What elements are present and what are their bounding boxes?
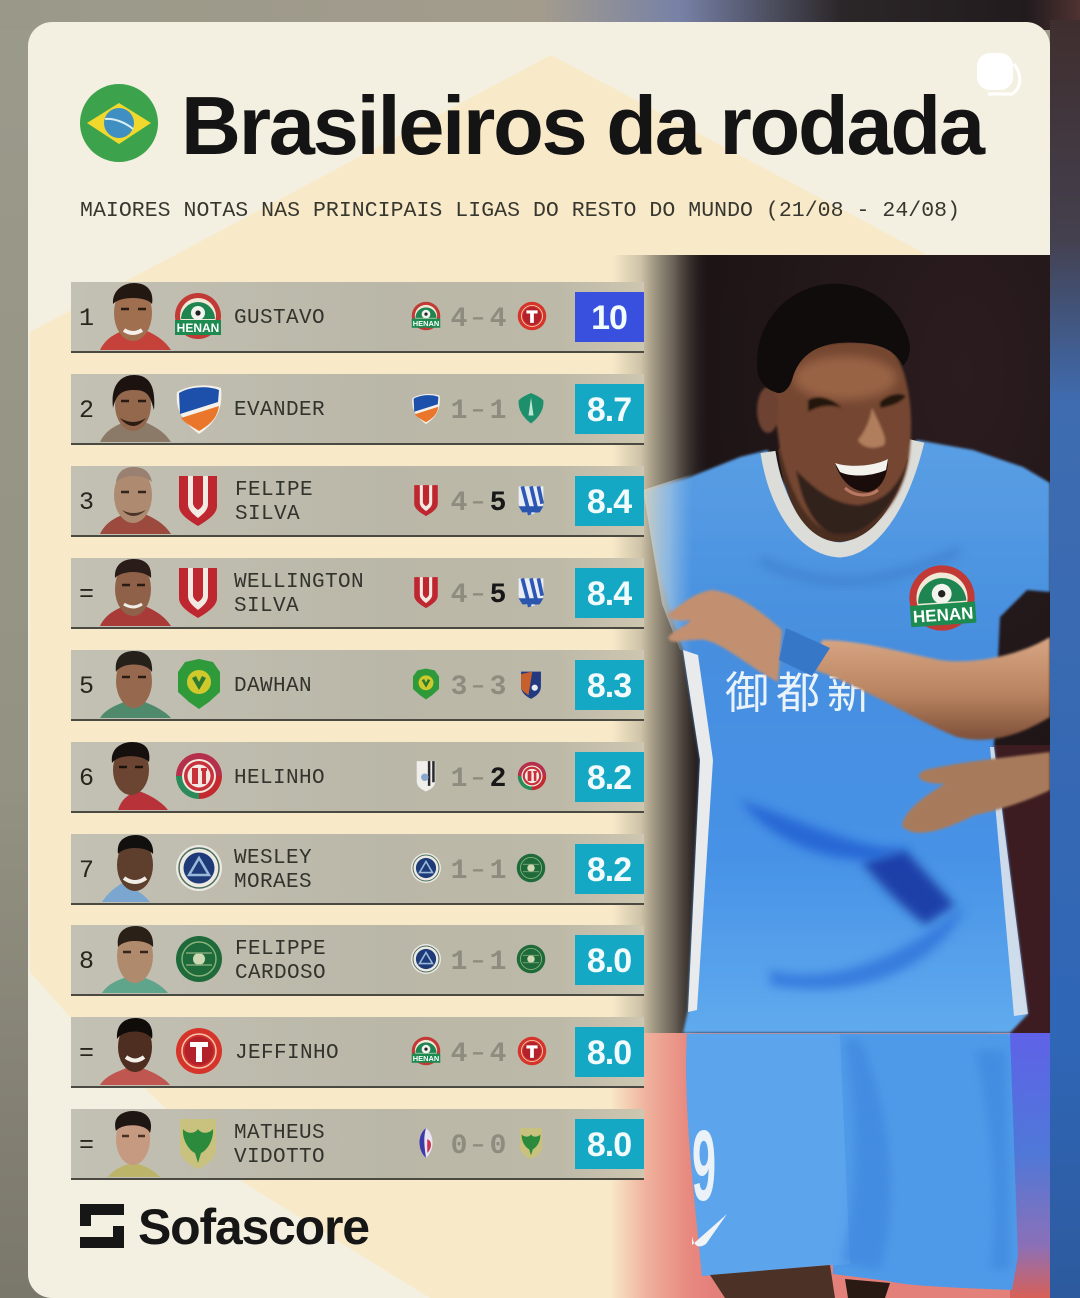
portrait bbox=[112, 742, 168, 810]
name: EVANDER bbox=[234, 399, 325, 422]
score: 4 bbox=[451, 580, 467, 611]
row 2: Evander bbox=[71, 374, 644, 445]
neck bbox=[778, 448, 908, 542]
rank: 8 bbox=[79, 947, 94, 976]
score: 1 bbox=[490, 396, 506, 427]
rating bbox=[575, 568, 644, 618]
logo mark bbox=[80, 1204, 124, 1248]
score bbox=[451, 672, 506, 703]
score bbox=[451, 947, 506, 978]
left fade bbox=[612, 255, 708, 1033]
rank: = bbox=[79, 1039, 94, 1068]
club badge: HENAN bbox=[177, 321, 219, 335]
score: – bbox=[471, 1040, 485, 1066]
score: – bbox=[471, 397, 485, 423]
subtitle: MAIORES NOTAS NAS PRINCIPAIS LIGAS DO RESTO DO MUNDO (21/08 - 24/08) bbox=[80, 199, 960, 223]
rank: = bbox=[79, 580, 94, 609]
jersey sponsor: 御都新 bbox=[725, 669, 871, 718]
rating bbox=[575, 476, 644, 526]
shorts: 9 bbox=[692, 1110, 716, 1222]
name: GUSTAVO bbox=[234, 307, 325, 330]
club badge bbox=[180, 1119, 216, 1169]
rank: 1 bbox=[79, 304, 94, 333]
club badge bbox=[176, 1028, 222, 1074]
forearm bbox=[815, 637, 1050, 740]
away badge bbox=[518, 762, 546, 790]
rating bbox=[575, 752, 644, 802]
portrait bbox=[100, 375, 171, 442]
row 1: Gustavo bbox=[71, 282, 644, 353]
score: 0 bbox=[490, 1131, 506, 1162]
score: 1 bbox=[451, 947, 467, 978]
henan crest on jersey bbox=[907, 563, 977, 633]
club badge bbox=[178, 659, 220, 709]
score: 3 bbox=[451, 672, 467, 703]
rating bbox=[575, 1119, 644, 1169]
rank: 7 bbox=[79, 856, 94, 885]
jersey creases bbox=[740, 550, 965, 989]
score: – bbox=[471, 673, 485, 699]
row 4: Wellington Silva bbox=[71, 558, 644, 629]
rank: 3 bbox=[79, 488, 94, 517]
portrait bbox=[102, 835, 153, 902]
name: FELIPPE bbox=[235, 938, 326, 961]
mouth bbox=[835, 459, 888, 492]
Sofascore logo bbox=[80, 1199, 370, 1255]
score: 3 bbox=[490, 672, 506, 703]
away badge bbox=[517, 945, 545, 973]
row 3: Felipe Silva bbox=[71, 466, 644, 537]
hand bbox=[667, 590, 782, 682]
rating: 8.2 bbox=[587, 759, 631, 797]
away badge bbox=[521, 672, 541, 699]
club badge bbox=[179, 476, 217, 526]
club badge bbox=[176, 936, 222, 982]
name: VIDOTTO bbox=[234, 1146, 325, 1169]
score: 4 bbox=[490, 304, 506, 335]
home badge bbox=[412, 1037, 440, 1065]
score bbox=[451, 764, 506, 795]
score: – bbox=[471, 489, 485, 515]
home badge bbox=[414, 485, 438, 516]
away badge bbox=[518, 1037, 546, 1065]
score bbox=[451, 1039, 506, 1070]
portrait bbox=[100, 467, 171, 534]
rating bbox=[575, 292, 644, 342]
portrait bbox=[100, 1018, 170, 1085]
rating: 8.7 bbox=[587, 391, 631, 429]
home badge bbox=[414, 577, 438, 608]
wristband bbox=[779, 628, 830, 676]
wordmark: Sofascore bbox=[138, 1199, 370, 1255]
name: SILVA bbox=[234, 595, 299, 618]
score: 2 bbox=[490, 764, 506, 795]
rating: 8.3 bbox=[587, 667, 631, 705]
rating: 8.0 bbox=[587, 942, 631, 980]
portrait bbox=[100, 283, 171, 350]
name: MORAES bbox=[234, 871, 312, 894]
club badge bbox=[176, 845, 222, 891]
club badge bbox=[179, 568, 217, 618]
score: 4 bbox=[490, 1039, 506, 1070]
row 10: Matheus Vidotto bbox=[71, 1109, 644, 1180]
score: 1 bbox=[451, 856, 467, 887]
name: DAWHAN bbox=[234, 675, 312, 698]
rating: 8.0 bbox=[587, 1034, 631, 1072]
away badge bbox=[519, 486, 543, 515]
home badge bbox=[411, 853, 441, 883]
head bbox=[757, 342, 911, 534]
score bbox=[451, 856, 506, 887]
away badge bbox=[519, 578, 543, 607]
name: MATHEUS bbox=[234, 1122, 325, 1145]
name: CARDOSO bbox=[235, 962, 326, 985]
portrait bbox=[108, 1111, 160, 1177]
name: HELINHO bbox=[234, 767, 325, 790]
club badge bbox=[175, 293, 221, 339]
score: – bbox=[471, 1132, 485, 1158]
rank: 5 bbox=[79, 672, 94, 701]
rating bbox=[575, 384, 644, 434]
score: 4 bbox=[451, 1039, 467, 1070]
row 7: Wesley Moraes bbox=[71, 834, 644, 905]
away badge bbox=[517, 854, 545, 882]
score: 1 bbox=[490, 856, 506, 887]
rank: = bbox=[79, 1131, 94, 1160]
jersey side panels bbox=[683, 650, 713, 1012]
portrait bbox=[100, 651, 171, 718]
row 5: Dawhan bbox=[71, 650, 644, 721]
home badge: HENAN bbox=[413, 319, 439, 328]
home badge bbox=[417, 761, 435, 792]
portrait bbox=[102, 926, 168, 993]
score: – bbox=[471, 857, 485, 883]
score: – bbox=[471, 948, 485, 974]
home badge bbox=[419, 1128, 433, 1158]
home badge bbox=[413, 668, 439, 700]
score: 1 bbox=[451, 396, 467, 427]
rating bbox=[575, 660, 644, 710]
rating bbox=[575, 935, 644, 985]
home badge bbox=[411, 944, 441, 974]
icon: white repost badge bbox=[977, 53, 1020, 94]
name: WELLINGTON bbox=[234, 571, 364, 594]
home badge bbox=[412, 394, 440, 424]
home badge bbox=[412, 302, 440, 330]
score: – bbox=[471, 581, 485, 607]
row 9: Jeffinho bbox=[71, 1017, 644, 1088]
name: JEFFINHO bbox=[235, 1042, 339, 1065]
score bbox=[451, 580, 506, 611]
rating: 10 bbox=[591, 299, 627, 337]
jersey shoulder fade bbox=[643, 474, 692, 652]
score bbox=[451, 396, 506, 427]
rank: 2 bbox=[79, 396, 94, 425]
jersey torso bbox=[645, 440, 1050, 1033]
score bbox=[451, 304, 506, 335]
away badge bbox=[519, 393, 543, 424]
rating: 8.4 bbox=[587, 483, 632, 521]
score: – bbox=[471, 765, 485, 791]
home badge: HENAN bbox=[413, 1054, 439, 1063]
row 8: Felippe Cardoso bbox=[71, 925, 644, 996]
score: 1 bbox=[451, 764, 467, 795]
rating bbox=[575, 1027, 644, 1077]
player photo bbox=[612, 255, 1050, 1298]
name: WESLEY bbox=[234, 847, 312, 870]
shorts bbox=[686, 1034, 1018, 1298]
rating: 8.4 bbox=[587, 575, 632, 613]
portrait bbox=[100, 559, 171, 626]
score: 4 bbox=[451, 304, 467, 335]
score bbox=[451, 1131, 506, 1162]
rank: 6 bbox=[79, 764, 94, 793]
row 6: Helinho bbox=[71, 742, 644, 813]
henan crest on jersey: HENAN bbox=[912, 604, 974, 627]
score bbox=[451, 488, 506, 519]
away badge bbox=[520, 1128, 542, 1159]
score: 5 bbox=[490, 580, 506, 611]
score: 0 bbox=[451, 1131, 467, 1162]
rating bbox=[575, 844, 644, 894]
rating: 8.2 bbox=[587, 851, 631, 889]
collar bbox=[768, 441, 917, 550]
club badge bbox=[177, 385, 221, 434]
name: SILVA bbox=[235, 503, 300, 526]
title: Brasileiros da rodada bbox=[181, 79, 986, 172]
other hand bbox=[902, 752, 1050, 833]
icon: Brazil flag bbox=[80, 84, 158, 162]
score: 4 bbox=[451, 488, 467, 519]
hair bbox=[757, 284, 910, 393]
away badge bbox=[518, 302, 546, 330]
score: 1 bbox=[490, 947, 506, 978]
score: – bbox=[471, 305, 485, 331]
rating: 8.0 bbox=[587, 1126, 631, 1164]
name: FELIPE bbox=[235, 479, 313, 502]
club badge bbox=[176, 753, 222, 799]
score: 5 bbox=[490, 488, 506, 519]
